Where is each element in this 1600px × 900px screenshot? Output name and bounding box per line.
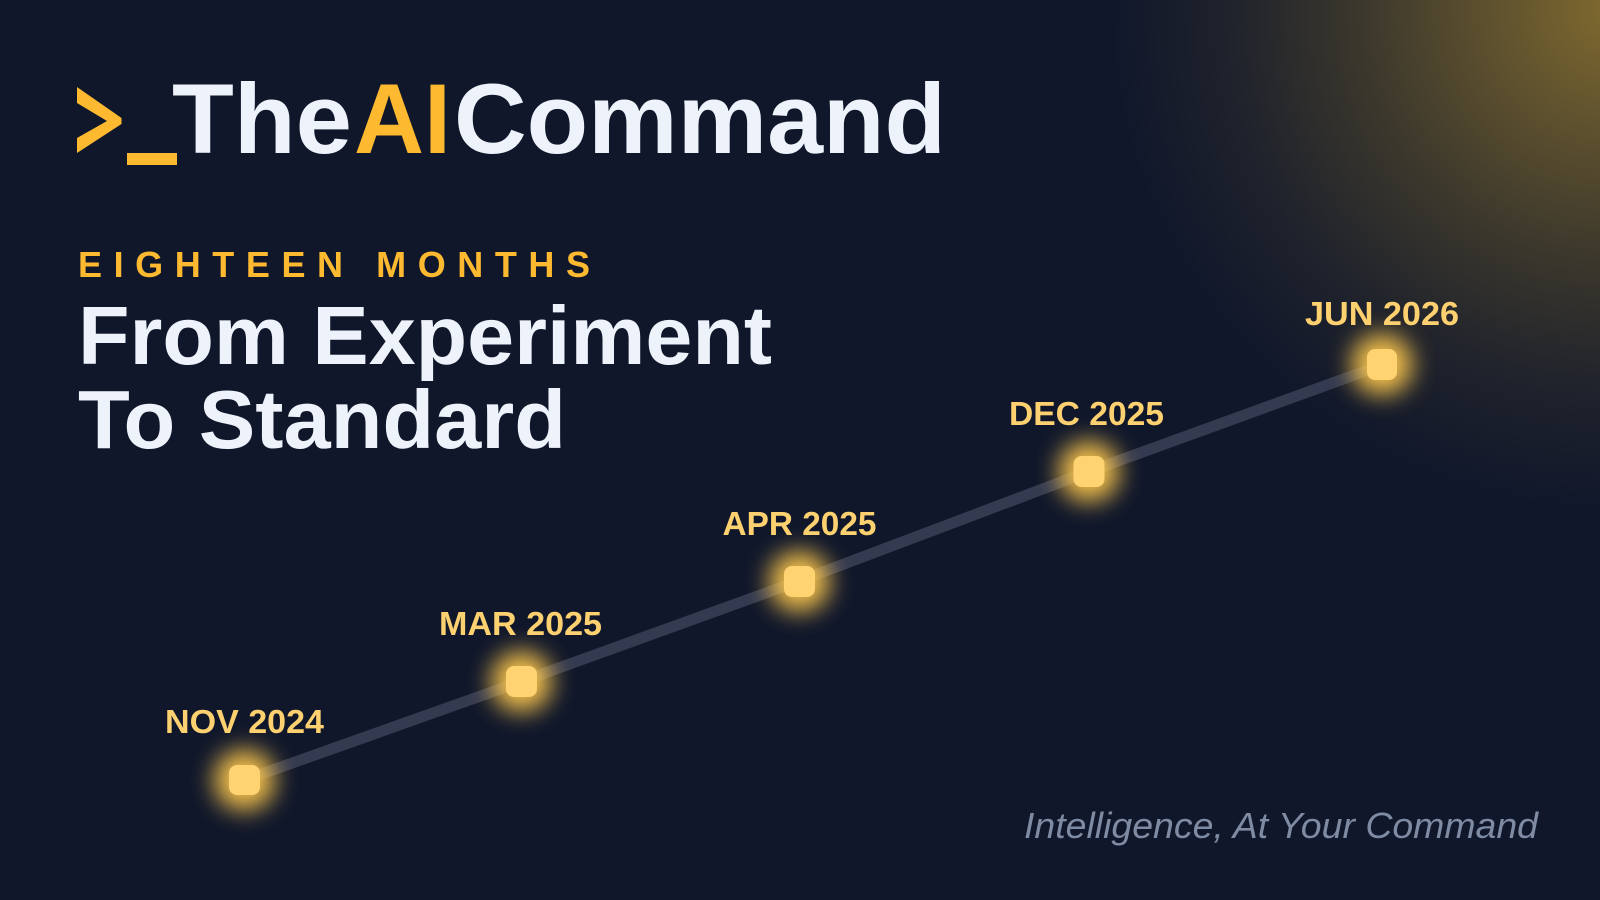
- milestone: Dec 2025: [1009, 395, 1164, 502]
- milestone: Jun 2026: JUN 2026: [1305, 295, 1459, 332]
- headline line 1: From Experiment: [78, 289, 772, 382]
- tagline: Intelligence, At Your Command: [1024, 805, 1539, 846]
- brand logo: [77, 63, 946, 174]
- icon: terminal prompt: [77, 87, 177, 165]
- milestone: Nov 2024: [165, 703, 325, 810]
- logo wordmark: AI: [354, 63, 451, 174]
- corner glow: [1100, 0, 1600, 520]
- headline line 2: To Standard: [78, 373, 566, 466]
- milestone: Dec 2025: DEC 2025: [1009, 395, 1164, 432]
- milestone: Apr 2025: [722, 505, 876, 612]
- logo wordmark: The: [172, 63, 352, 174]
- headline: [78, 289, 772, 466]
- logo wordmark: Command: [454, 63, 946, 174]
- milestone: Mar 2025: MAR 2025: [439, 605, 602, 642]
- milestone: Jun 2026: [1305, 295, 1459, 394]
- eyebrow: EIGHTEEN MONTHS: [78, 244, 590, 285]
- milestone: Mar 2025: [439, 605, 602, 712]
- milestone: Nov 2024: NOV 2024: [165, 703, 325, 740]
- milestone: Apr 2025: APR 2025: [722, 505, 876, 542]
- timeline line: [244, 365, 1382, 780]
